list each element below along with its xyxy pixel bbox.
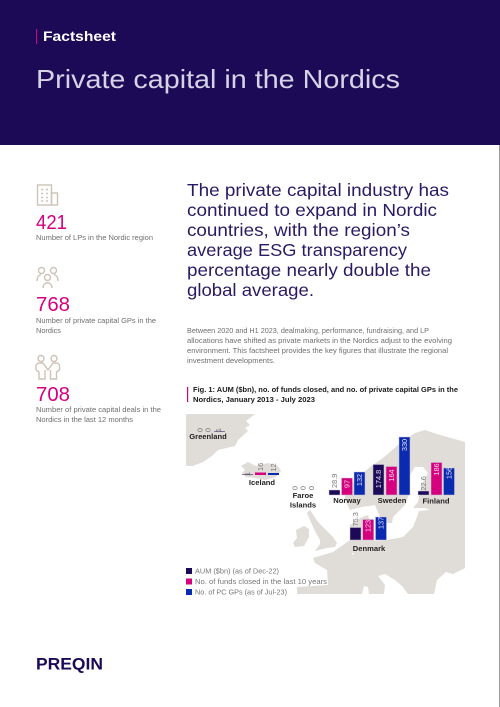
intro paragraph: investment developments. (187, 356, 275, 365)
chart legend: AUM ($bn) (as of Dec-22) (195, 568, 279, 576)
lead heading (187, 180, 449, 300)
lead heading: average ESG transparency (187, 240, 407, 260)
bars: Sweden (373, 437, 410, 505)
bars: Sweden: 164 (387, 469, 396, 482)
bars: Sweden: Sweden (378, 496, 407, 505)
bars: Denmark: 75.3 (351, 512, 360, 526)
bars: Finland: 22.6 (419, 476, 428, 490)
bars: Finland: 186 (432, 463, 441, 476)
lead heading: global average. (187, 280, 314, 300)
bars: Iceland: 1 (243, 472, 252, 476)
bars: Faroe Islands: 0 (290, 486, 300, 490)
bars: Faroe Islands: 0 (298, 486, 308, 490)
bars: Norway: 97 (342, 480, 352, 488)
map of the Nordics (186, 414, 465, 594)
chart legend: No. of PC GPs (as of Jul-23) (195, 588, 287, 596)
chart legend (186, 568, 327, 596)
stat: GPs: Number of private capital GPs in the (36, 316, 156, 325)
bars: Denmark: Denmark (353, 544, 386, 553)
figure title (187, 385, 458, 404)
stat: deals (36, 356, 161, 424)
stat: deals: 708 (36, 383, 70, 406)
bars: Denmark: 137 (376, 517, 386, 529)
lead heading: percentage nearly double the (187, 260, 431, 280)
stat: GPs (36, 268, 156, 335)
figure title: Nordics, January 2013 - July 2023 (193, 395, 315, 404)
bars: Greenland: Greenland (189, 432, 227, 441)
bars: Greenland: 0 (204, 428, 212, 432)
bars: Iceland: 16 (256, 463, 265, 471)
bars: Finland: Finland (422, 496, 450, 506)
stat: deals: Number of private capital deals in the (36, 405, 161, 414)
intro paragraph: allocations have shifted as private markets in the Nordics adjust to the evolving (187, 336, 452, 345)
stat: GPs: 768 (36, 293, 70, 316)
bars: Greenland: 0 (196, 428, 204, 432)
bars: Iceland (242, 463, 279, 487)
bars: Faroe Islands: Faroe (293, 491, 313, 500)
bars: Faroe Islands: Islands (290, 500, 316, 510)
stat: LPs: Number of LPs in the Nordic region (36, 233, 153, 242)
stat: LPs: 421 (36, 211, 67, 234)
stat: LPs (36, 185, 153, 242)
header banner: Factsheet (43, 28, 116, 44)
logo: Preqin: PREQIN (36, 654, 103, 674)
intro paragraph: Between 2020 and H1 2023, dealmaking, performance, fundraising, and LP (187, 326, 429, 335)
chart legend: No. of funds closed in the last 10 years (195, 578, 327, 586)
bars: Sweden: 174.8 (374, 470, 383, 488)
bars: Sweden: 330 (400, 439, 409, 451)
stat: deals: Nordics in the last 12 months (36, 415, 133, 424)
figure title: Fig. 1: AUM ($bn), no. of funds closed, and no. of private capital GPs in the (193, 385, 458, 394)
intro paragraph: environment. This factsheet provides the key figures that illustrate the regional (187, 346, 448, 355)
lead heading: The private capital industry has (187, 180, 449, 200)
header banner: Private capital in the Nordics (36, 64, 400, 94)
bars: Denmark: 123 (364, 520, 373, 532)
bars: Norway (329, 472, 365, 505)
bars: Faroe Islands: 0 (307, 486, 316, 490)
stat: GPs: Nordics (36, 326, 61, 335)
bars: Denmark (350, 512, 386, 553)
header banner (0, 0, 500, 145)
bars: Norway: Norway (333, 496, 361, 505)
lead heading: continued to expand in Nordic (187, 200, 437, 220)
bars: Norway: 28.9 (330, 474, 339, 488)
bars: Finland: 156 (444, 467, 454, 479)
bars: Greenland: 1 (214, 428, 223, 432)
bars: Iceland: Iceland (249, 478, 275, 487)
bars: Faroe Islands (290, 486, 316, 510)
bars: Norway: 132 (355, 474, 364, 486)
bars: Greenland (189, 428, 227, 441)
bars: Finland (418, 462, 454, 506)
lead heading: countries, with the region’s (187, 220, 410, 240)
bars: Iceland: 12 (269, 463, 278, 472)
intro paragraph (187, 326, 452, 365)
